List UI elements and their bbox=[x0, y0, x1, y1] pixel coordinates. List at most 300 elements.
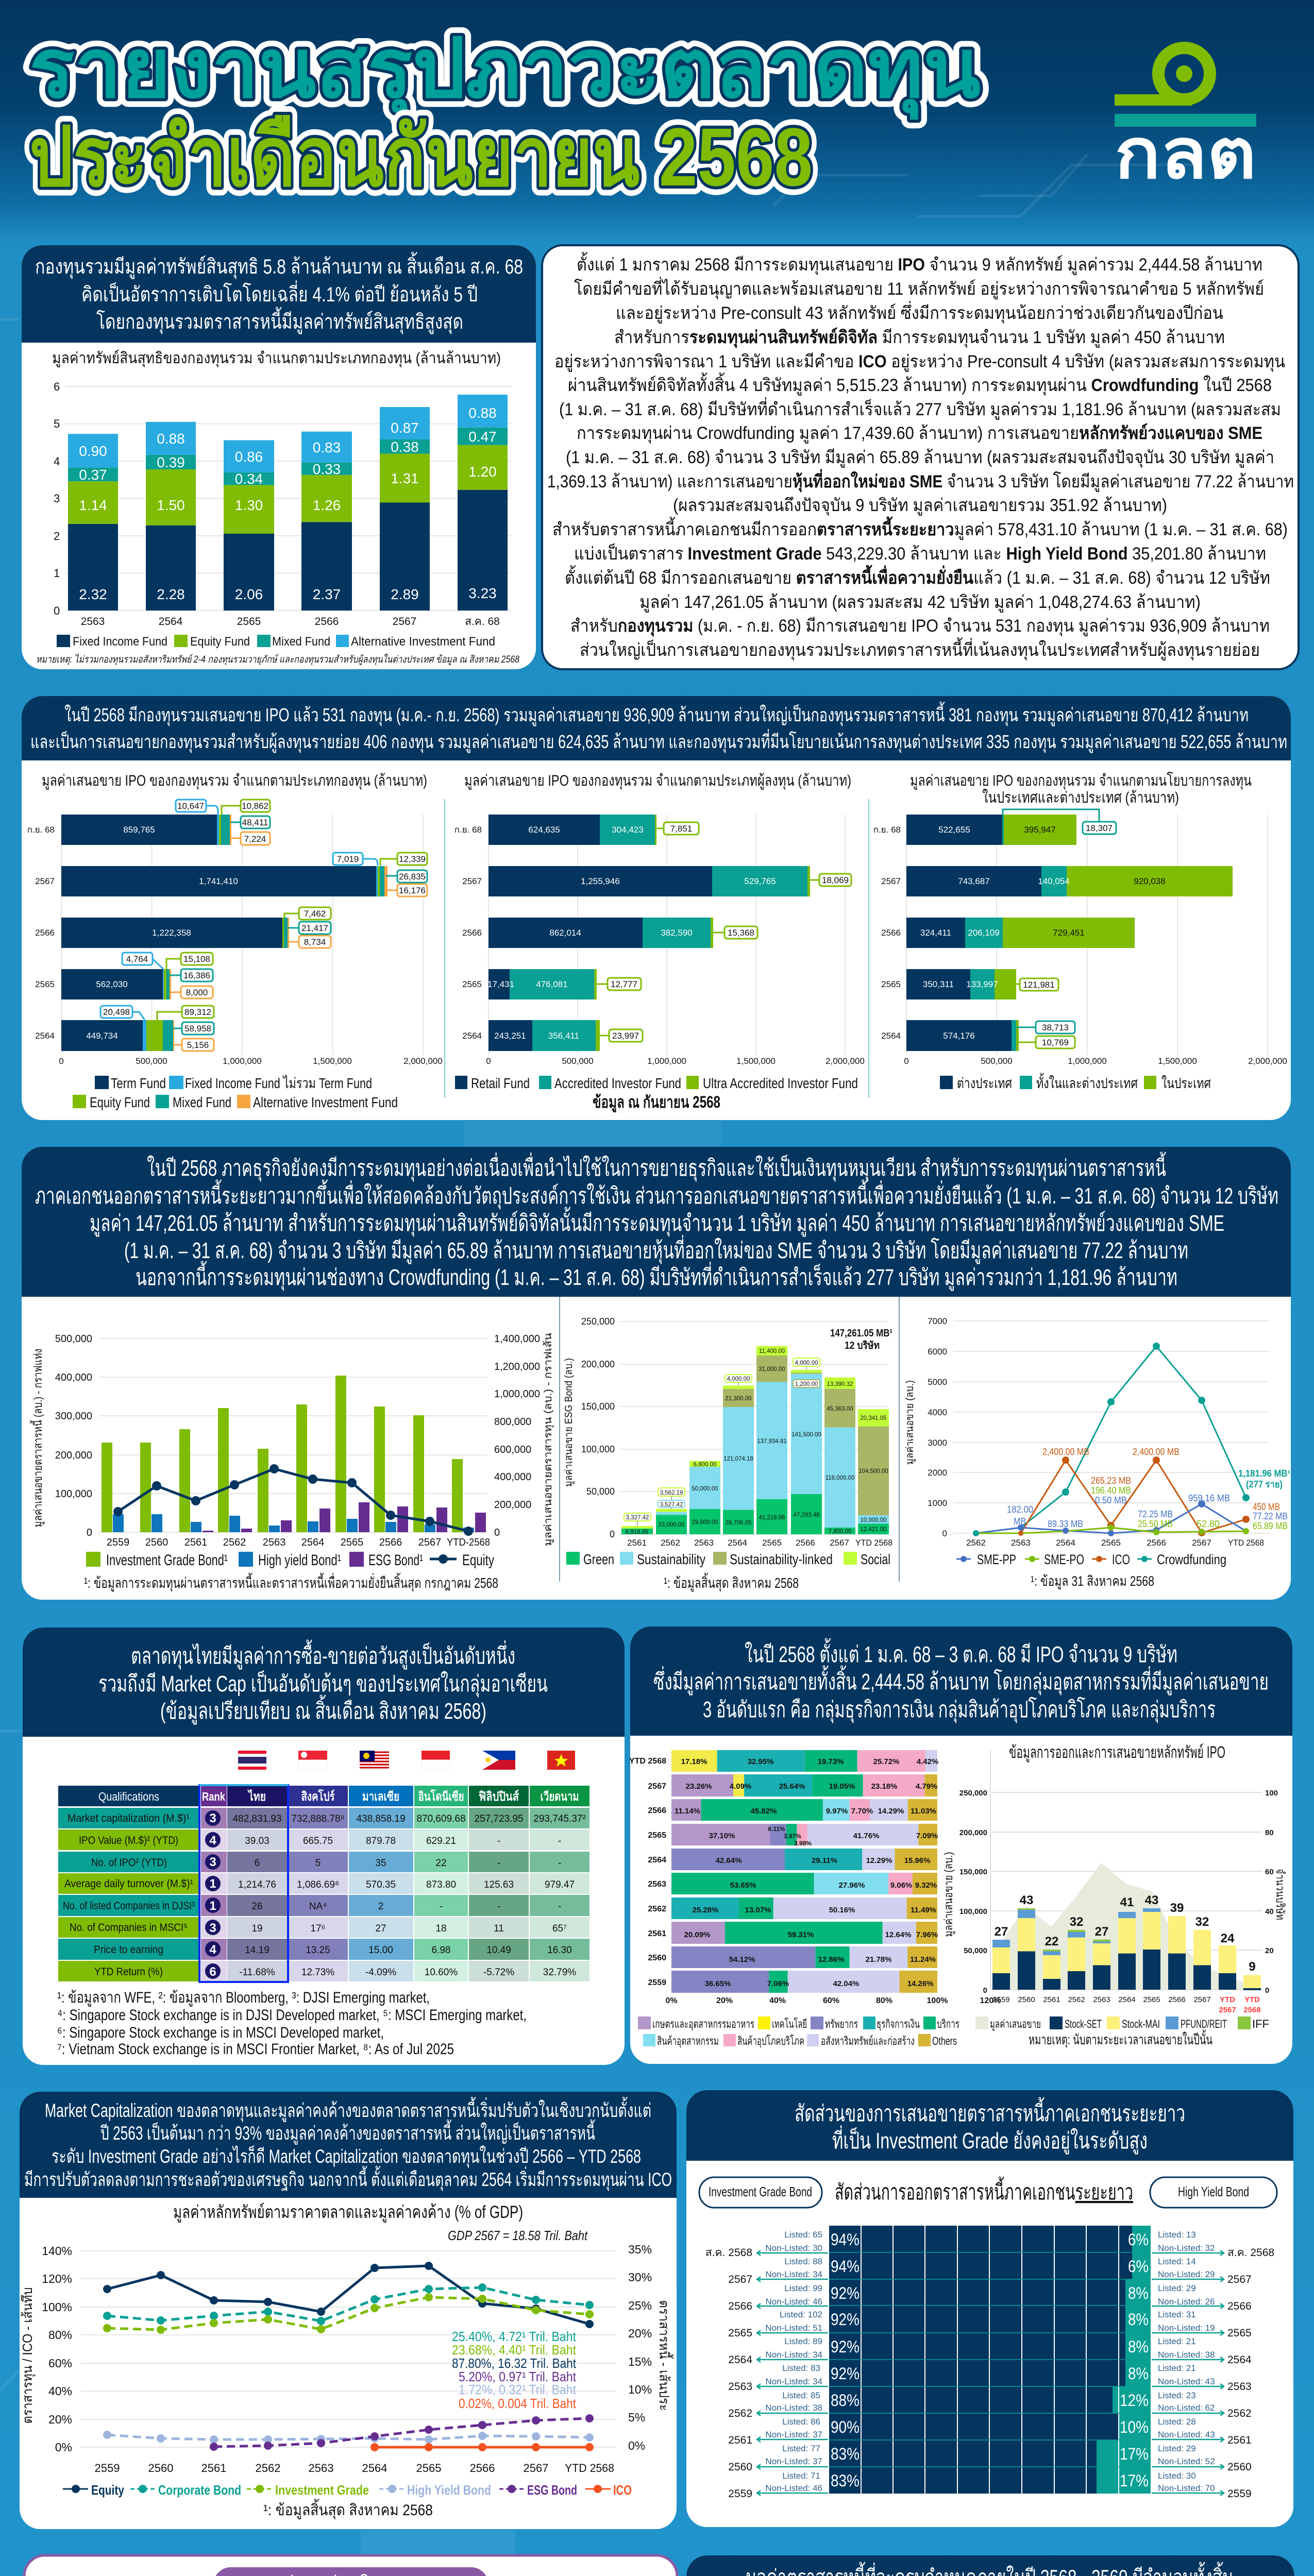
bar chart: investment policy: 2567 bbox=[881, 876, 901, 886]
bar chart: investment policy: 743,687 bbox=[958, 876, 990, 886]
legend: market cap: ESG Bond bbox=[527, 2482, 577, 2498]
bar chart: fund type: 8,000 bbox=[186, 988, 208, 997]
bar chart: fund type: 2565 bbox=[35, 979, 55, 989]
butterfly chart: bond share: 2566 bbox=[728, 2300, 752, 2312]
stacked bar chart: industry share bbox=[629, 1750, 1001, 2005]
stacked bar and area chart: IPO securities: 100,000 bbox=[959, 1907, 987, 1916]
bar chart: investor type: 117,431 bbox=[483, 979, 514, 989]
legend: industry share: บริการ bbox=[937, 2018, 959, 2030]
stacked bar chart: NAV: 2565 bbox=[237, 616, 261, 628]
table: ASEAN comparison: 870,609.68 bbox=[416, 1814, 466, 1824]
stacked bar chart: ESG bond: 118,000.00 bbox=[826, 1475, 854, 1481]
legend: IPO securities: PFUND/REIT bbox=[1181, 2018, 1227, 2030]
heading: corporate fundraising bbox=[35, 1151, 1278, 1291]
table: ASEAN comparison: 125.63 bbox=[484, 1879, 514, 1890]
stacked bar chart: industry share: 19.05% bbox=[829, 1782, 855, 1791]
bar chart: fund type: 58,958 bbox=[184, 1024, 211, 1033]
bar chart: investment policy: 38,713 bbox=[1042, 1023, 1069, 1032]
stacked bar chart: ESG bond bbox=[563, 1316, 892, 1548]
bar chart: fund type: ก.ย. 68 bbox=[27, 825, 55, 835]
stacked bar and area chart: IPO securities: 32 bbox=[1195, 1915, 1209, 1929]
legend: market cap: Investment Grade bbox=[275, 2482, 369, 2498]
table: ASEAN comparison: 257,723.95 bbox=[474, 1814, 524, 1824]
panel: summary text: (ผลรวมสะสมจนถึงปัจจุบัน 9 บริษัท มูลค่าเสนอขายรวม 351.92 ล้านบาท) bbox=[673, 496, 1167, 516]
stacked bar and area chart: IPO securities: มูลค่าเสนอขาย (ลบ.) bbox=[942, 1852, 955, 1937]
chart title: market cap: มูลค่าหลักทรัพย์ตามราคาตลาดและมูลค่าคงค้าง (% of GDP) bbox=[173, 2202, 523, 2223]
table: ASEAN comparison: No. of Companies in MSCI⁵ bbox=[70, 1922, 188, 1934]
stacked bar chart: ESG bond: 6,918.85 bbox=[626, 1529, 648, 1535]
stacked bar chart: NAV: 2.28 bbox=[157, 586, 185, 602]
combo chart: bonds and equity: 1,000,000 bbox=[494, 1388, 540, 1400]
table: ASEAN comparison: 4 bbox=[209, 1943, 216, 1957]
combo chart: bonds and equity: 200,000 bbox=[55, 1450, 92, 1461]
bar chart: fund type: 10,647 bbox=[177, 801, 204, 811]
bar chart: investment policy: 133,997 bbox=[966, 979, 998, 989]
stacked bar chart: industry share: YTD 2568 bbox=[629, 1757, 666, 1766]
stacked bar and area chart: IPO securities: 2566 bbox=[1168, 1995, 1186, 2004]
stacked bar and area chart: IPO securities: 80 bbox=[1265, 1828, 1274, 1837]
table: ASEAN comparison: 1,214.76 bbox=[238, 1879, 276, 1890]
line chart: other fundraising: 1,181.96 MB¹ bbox=[1238, 1468, 1290, 1479]
stacked bar chart: industry share: 40% bbox=[769, 1996, 786, 2005]
butterfly chart: bond share: 17% bbox=[1120, 2445, 1149, 2463]
combo chart: bonds and equity: 200,000 bbox=[494, 1499, 531, 1511]
table: ASEAN comparison: 19 bbox=[251, 1923, 263, 1934]
stacked bar chart: NAV: 2.32 bbox=[79, 586, 107, 602]
butterfly chart: bond share: Non-Listed: 19 bbox=[1158, 2323, 1215, 2333]
table: ASEAN comparison: No. of listed Companies in DJSI³ bbox=[63, 1900, 195, 1912]
stacked bar chart: ESG bond: 0 bbox=[610, 1529, 615, 1539]
combo chart: bonds and equity: มูลค่าเสนอขายตราสารหนี้ (ลบ.) - กราฟแท่ง bbox=[30, 1349, 45, 1527]
line chart: other fundraising: (277 ราย) bbox=[1246, 1479, 1283, 1489]
stacked bar chart: ESG bond: 150,000 bbox=[581, 1401, 615, 1412]
stacked bar chart: ESG bond: 50,000 bbox=[586, 1486, 615, 1497]
butterfly chart: bond share: 8% bbox=[1128, 2364, 1149, 2383]
stacked bar chart: NAV: 0.47 bbox=[468, 429, 497, 445]
table: ASEAN comparison: - bbox=[558, 1901, 561, 1912]
butterfly chart: bond share: 8% bbox=[1128, 2310, 1149, 2329]
note: other fundraising: ¹: ข้อมูล 31 สิงหาคม 2568 bbox=[1031, 1573, 1154, 1589]
butterfly chart: bond share: Listed: 13 bbox=[1158, 2230, 1196, 2240]
line chart: market cap bbox=[20, 2243, 674, 2475]
legend: IPO securities: Stock-MAI bbox=[1122, 2018, 1160, 2030]
pill: High Yield Bond: High Yield Bond bbox=[1178, 2184, 1249, 2199]
stacked bar and area chart: IPO securities: 2568 bbox=[1243, 2006, 1261, 2014]
stacked bar and area chart: IPO securities: 2559 bbox=[992, 1995, 1010, 2004]
legend: industry share bbox=[638, 2016, 959, 2048]
butterfly chart: bond share: 94% bbox=[831, 2230, 860, 2249]
table: ASEAN comparison: 482,831.93 bbox=[232, 1814, 282, 1824]
butterfly chart: bond share: 2561 bbox=[1227, 2434, 1252, 2446]
bar chart: investment policy: 2,000,000 bbox=[1248, 1056, 1287, 1066]
table: ASEAN comparison: 1 bbox=[209, 1877, 216, 1891]
stacked bar and area chart: IPO securities: 43 bbox=[1145, 1893, 1158, 1907]
bar chart: fund type: 449,734 bbox=[86, 1031, 118, 1041]
stacked bar chart: industry share: 13.07% bbox=[745, 1906, 771, 1914]
panel: summary text: มูลค่า 147,261.05 ล้านบาท (ผลรวมสะสม 42 บริษัท มูลค่า 1,048,274.63 ล้านบาท) bbox=[639, 592, 1201, 613]
stacked bar chart: NAV: 5 bbox=[54, 417, 60, 430]
stacked bar chart: NAV: 2567 bbox=[393, 616, 416, 628]
legend: fund type: Alternative Investment Fund bbox=[253, 1094, 398, 1110]
line chart: other fundraising: 3000 bbox=[928, 1438, 947, 1448]
bar chart: fund type: 1,741,410 bbox=[199, 876, 238, 886]
stacked bar chart: industry share: 11.14% bbox=[675, 1807, 700, 1816]
butterfly chart: bond share: ส.ค. 2568 bbox=[705, 2247, 752, 2259]
butterfly chart: bond share: 2562 bbox=[728, 2408, 752, 2419]
heading: investment grade share: ที่เป็น Investment Grade ยังคงอยู่ในระดับสูง bbox=[832, 2125, 1148, 2155]
table: ASEAN comparison: Rank bbox=[202, 1790, 225, 1803]
butterfly chart: bond share: Non-Listed: 43 bbox=[1158, 2377, 1215, 2386]
bar chart: investment policy: 574,176 bbox=[943, 1031, 975, 1041]
legend: ESG bond bbox=[566, 1551, 890, 1567]
stacked bar and area chart: IPO securities bbox=[942, 1750, 1287, 2014]
stacked bar chart: industry share: 53.65% bbox=[730, 1881, 756, 1890]
stacked bar chart: NAV: 1.26 bbox=[313, 497, 341, 513]
legend: bonds and equity: Equity bbox=[462, 1552, 494, 1569]
line chart: other fundraising: 0 bbox=[942, 1529, 947, 1538]
legend: other fundraising: Crowdfunding bbox=[1157, 1552, 1226, 1567]
note: IPO securities: หมายเหตุ: นับตามระยะเวลาเสนอขายในปีนั้น bbox=[1029, 2029, 1212, 2048]
stacked bar chart: NAV: ส.ค. 68 bbox=[465, 616, 500, 628]
stacked bar chart: ESG bond: 137,934.81 bbox=[757, 1438, 787, 1445]
bar chart: investor type: 7,851 bbox=[670, 824, 692, 834]
butterfly chart: bond share: Non-Listed: 34 bbox=[765, 2269, 822, 2279]
bar chart: investment policy: 1,000,000 bbox=[1068, 1056, 1107, 1066]
stacked bar chart: industry share: 60% bbox=[823, 1996, 839, 2005]
pill: Investment Grade Bond: Investment Grade Bond bbox=[709, 2184, 812, 2199]
butterfly chart: bond share: 2559 bbox=[728, 2488, 752, 2500]
butterfly chart: bond share bbox=[705, 2226, 1274, 2500]
bar chart: fund type: 21,417 bbox=[301, 923, 328, 933]
stacked bar chart: NAV: 6 bbox=[54, 380, 60, 393]
note: bonds: ¹: ข้อมูลการระดมทุนผ่านตราสารหนี้และตราสารหนี้เพื่อความยั่งยืนสิ้นสุด กรกฎาคม 2568 bbox=[84, 1572, 498, 1592]
butterfly chart: bond share: Listed: 21 bbox=[1158, 2336, 1196, 2346]
table: ASEAN comparison: YTD Return (%) bbox=[94, 1966, 163, 1978]
legend: ESG bond: Green bbox=[583, 1551, 614, 1567]
table: ASEAN comparison: 6 bbox=[209, 1965, 216, 1979]
legend: industry share: ธุรกิจการเงิน bbox=[877, 2018, 920, 2031]
stacked bar and area chart: IPO securities: 9 bbox=[1249, 1960, 1256, 1974]
stacked bar chart: industry share: 2562 bbox=[648, 1905, 666, 1913]
line chart: other fundraising: 2,400.00 MB bbox=[1042, 1447, 1089, 1457]
panel: summary text bbox=[542, 245, 1299, 669]
table: ASEAN comparison: 438,858.19 bbox=[356, 1814, 406, 1824]
butterfly chart: bond share: 92% bbox=[831, 2337, 860, 2356]
line chart: other fundraising: 2564 bbox=[1056, 1538, 1075, 1548]
stacked bar chart: industry share: 2563 bbox=[648, 1880, 666, 1889]
line chart: market cap: ตราสารทุน / ICO - เส้นทึบ bbox=[20, 2287, 36, 2424]
bar chart: investor type: 529,765 bbox=[744, 876, 776, 886]
butterfly chart: bond share: 8% bbox=[1128, 2337, 1149, 2356]
line chart: other fundraising: 265.23 MB bbox=[1091, 1476, 1131, 1486]
stacked bar and area chart: IPO securities: 20 bbox=[1265, 1946, 1274, 1955]
stacked bar chart: industry share: 4.42% bbox=[917, 1757, 938, 1766]
panel: corporate fundraising bbox=[22, 1147, 1291, 1600]
bar chart: investor type: 500,000 bbox=[562, 1056, 594, 1066]
table: ASEAN comparison: 6.98 bbox=[432, 1945, 450, 1956]
bar chart: fund type bbox=[27, 800, 443, 1066]
panel: summary text: อยู่ระหว่างการพิจารณา 1 บริษัท และมีคำขอ ICO อยู่ระหว่าง Pre-consult 4 บริษัท (ผลรวมสะสมการระดมทุน bbox=[554, 352, 1285, 372]
line chart: market cap: 2564 bbox=[362, 2462, 387, 2475]
butterfly chart: bond share: Listed: 28 bbox=[1158, 2417, 1196, 2427]
legend: fund type bbox=[73, 1075, 398, 1110]
combo chart: bonds and equity: 0 bbox=[494, 1527, 500, 1538]
stacked bar and area chart: IPO securities: 50,000 bbox=[964, 1946, 987, 1955]
stacked bar chart: ESG bond: 21,300.00 bbox=[725, 1396, 752, 1402]
stacked bar chart: NAV: 0.38 bbox=[391, 439, 419, 455]
table: ASEAN comparison: 3 bbox=[209, 1921, 216, 1935]
table: ASEAN comparison: 293,745.37² bbox=[533, 1814, 586, 1824]
table: ASEAN comparison: Price to earning bbox=[94, 1944, 163, 1956]
legend: industry share: ทรัพยากร bbox=[825, 2018, 858, 2030]
heading: market cap: ระดับ Investment Grade อย่างไรก็ดี Market Capitalization ของตลาดทุนในช่วงปี 2566 – YTD 2568 bbox=[52, 2144, 641, 2168]
stacked bar chart: industry share: 12.29% bbox=[866, 1856, 892, 1865]
chart titles: ในประเทศและต่างประเทศ (ล้านบาท) bbox=[982, 789, 1179, 806]
heading: fund IPO bbox=[30, 701, 1287, 753]
stacked bar and area chart: IPO securities: YTD bbox=[1220, 1995, 1235, 2004]
stacked bar chart: industry share: 80% bbox=[876, 1996, 892, 2005]
stacked bar chart: industry share: 21.78% bbox=[866, 1955, 891, 1964]
stacked bar chart: ESG bond: 250,000 bbox=[581, 1316, 615, 1327]
line chart: other fundraising: 5000 bbox=[928, 1377, 947, 1387]
stacked bar chart: ESG bond: YTD 2568 bbox=[855, 1538, 892, 1548]
combo chart: bonds and equity: 0 bbox=[87, 1527, 92, 1538]
butterfly chart: bond share: 2567 bbox=[1227, 2274, 1252, 2285]
table: ASEAN comparison: 1 bbox=[209, 1899, 216, 1913]
heading: IPO by industry bbox=[653, 1638, 1269, 1723]
stacked bar chart: ESG bond: 141,500.00 bbox=[791, 1432, 821, 1438]
butterfly chart: bond share: Listed: 85 bbox=[782, 2391, 820, 2400]
panel: fund IPO bbox=[22, 696, 1291, 1120]
notes: ASEAN comparison: ⁴: Singapore Stock exchange is in DJSI Developed market, ⁵: MSCI Emerging market, bbox=[57, 2007, 527, 2024]
stacked bar and area chart: IPO securities: 100 bbox=[1265, 1789, 1278, 1798]
legend: fund type: Mixed Fund bbox=[173, 1094, 231, 1110]
stacked bar chart: NAV: 0.90 bbox=[79, 443, 107, 459]
panel: summary text: สำหรับกองทุนรวม (ม.ค. - ก.ย. 68) มีการเสนอขาย IPO จำนวน 531 กองทุน มูลค่ารวม 936,909 ล้านบาท bbox=[570, 616, 1270, 637]
bar chart: investment policy: 10,769 bbox=[1042, 1038, 1069, 1047]
bar chart: fund type: 1,000,000 bbox=[223, 1056, 262, 1066]
table: ASEAN comparison: 16.30 bbox=[547, 1945, 572, 1956]
bar chart: fund type: 2,000,000 bbox=[403, 1056, 443, 1066]
legend: market cap: Equity bbox=[91, 2482, 124, 2498]
bar chart: investment policy: 0 bbox=[904, 1056, 909, 1066]
line chart: other fundraising: 2562 bbox=[966, 1538, 986, 1548]
stacked bar chart: ESG bond: 29,600.00 bbox=[692, 1519, 718, 1526]
stacked bar and area chart: IPO securities: 39 bbox=[1170, 1901, 1184, 1915]
butterfly chart: bond share: Listed: 88 bbox=[784, 2257, 822, 2266]
line chart: market cap: 2562 bbox=[256, 2462, 280, 2475]
butterfly chart: bond share: Listed: 14 bbox=[1158, 2257, 1196, 2266]
legend: IPO securities bbox=[975, 2016, 1269, 2031]
butterfly chart: bond share: Non-Listed: 32 bbox=[1158, 2243, 1215, 2253]
legend: market cap: ICO bbox=[613, 2482, 632, 2498]
bar chart: investor type: ก.ย. 68 bbox=[454, 825, 482, 835]
stacked bar chart: ESG bond: 3,327.42 bbox=[626, 1515, 649, 1521]
stacked bar chart: ESG bond: 147,261.05 MB¹ bbox=[830, 1328, 892, 1339]
panel: ASEAN comparison bbox=[23, 1628, 625, 2065]
stacked bar chart: industry share: 19.73% bbox=[818, 1757, 844, 1766]
title: รายงานสรุปภาวะตลาดทุน bbox=[29, 22, 981, 120]
line chart: market cap: 0% bbox=[628, 2439, 645, 2452]
stacked bar chart: ESG bond: 200,000 bbox=[581, 1359, 615, 1369]
stacked bar and area chart: IPO securities: 0 bbox=[983, 1986, 987, 1995]
stacked bar chart: NAV: 1.31 bbox=[391, 470, 419, 486]
combo chart: bonds and equity: 2567 bbox=[418, 1537, 441, 1548]
legend: NAV: Mixed Fund bbox=[272, 635, 330, 649]
table: ASEAN comparison: 665.75 bbox=[303, 1836, 333, 1846]
butterfly chart: bond share: Non-Listed: 62 bbox=[1158, 2403, 1215, 2413]
butterfly chart: bond share: 83% bbox=[831, 2445, 860, 2463]
line chart: market cap: 23.68%, 4.40¹ Tril. Baht bbox=[452, 2342, 577, 2358]
bar chart: investment policy: 920,038 bbox=[1134, 876, 1166, 886]
line chart: market cap: 0.02%, 0.004 Tril. Baht bbox=[459, 2396, 577, 2411]
stacked bar chart: industry share: 25.64% bbox=[779, 1782, 805, 1791]
stacked bar chart: industry share: 23.26% bbox=[686, 1782, 712, 1791]
notes: ASEAN comparison: ⁶: Singapore Stock exchange is in MSCI Developed market, bbox=[57, 2024, 384, 2041]
panel: summary text: สำหรับตราสารหนี้ภาคเอกชนมีการออกตราสารหนี้ระยะยาวมูลค่า 578,431.10 ล้านบาท (1 ม.ค. – 31 ส.ค. 68) bbox=[552, 516, 1288, 540]
table: ASEAN comparison: มาเลเซีย bbox=[362, 1790, 399, 1804]
legend: bonds and equity: Investment Grade Bond¹ bbox=[106, 1552, 228, 1569]
butterfly chart: bond share: 8% bbox=[1128, 2284, 1149, 2302]
bar chart: fund type: 89,312 bbox=[184, 1007, 211, 1017]
combo chart: bonds and equity: 100,000 bbox=[55, 1488, 92, 1500]
line chart: market cap: 2566 bbox=[470, 2462, 495, 2475]
stacked bar chart: industry share: 41.76% bbox=[853, 1832, 879, 1840]
stacked bar and area chart: IPO securities: YTD bbox=[1244, 1995, 1260, 2004]
combo chart: bonds and equity: 2565 bbox=[341, 1537, 363, 1548]
butterfly chart: bond share: Non-Listed: 46 bbox=[765, 2297, 822, 2307]
panel: maturing bonds bbox=[686, 2555, 1294, 2576]
stacked bar chart: industry share: 23.18% bbox=[871, 1782, 897, 1791]
stacked bar chart: ESG bond: 31,000.00 bbox=[759, 1366, 785, 1372]
line chart: market cap: 2565 bbox=[416, 2462, 441, 2475]
line chart: market cap: 35% bbox=[628, 2243, 652, 2256]
stacked bar and area chart: IPO securities: 43 bbox=[1020, 1893, 1033, 1907]
stacked bar chart: industry share: 14.26% bbox=[907, 1979, 933, 1988]
butterfly chart: bond share: 94% bbox=[831, 2257, 860, 2276]
stacked bar chart: industry share: 2559 bbox=[648, 1978, 666, 1987]
butterfly chart: bond share: Listed: 71 bbox=[782, 2471, 820, 2481]
note: NAV: หมายเหตุ: ไม่รวมกองทุนรวมอสังหาริมทรัพย์ 2-4 กองทุนรวมวายุภักษ์ และกองทุนรวมสำหรับผู้ลงทุนในต่างประเทศ ข้อมูล ณ สิงหาคม 2568 bbox=[36, 653, 519, 665]
bar chart: fund type: 16,386 bbox=[183, 971, 210, 980]
combo chart: bonds and equity: 600,000 bbox=[494, 1444, 531, 1455]
legend: investor type: Ultra Accredited Investor Fund bbox=[703, 1075, 858, 1091]
legend: other fundraising bbox=[956, 1552, 1226, 1567]
title: ประจำเดือนกันยายน 2568 bbox=[29, 111, 813, 203]
butterfly chart: bond share: Non-Listed: 38 bbox=[1158, 2350, 1215, 2360]
stacked bar chart: NAV: 4 bbox=[54, 455, 60, 468]
table: ASEAN comparison: ฟิลิปปินส์ bbox=[479, 1789, 519, 1804]
heading: mutual fund NAV: คิดเป็นอัตราการเติบโตโดยเฉลี่ย 4.1% ต่อปี ย้อนหลัง 5 ปี bbox=[81, 280, 478, 306]
combo chart: bonds and equity: 300,000 bbox=[55, 1411, 92, 1422]
butterfly chart: bond share: ส.ค. 2568 bbox=[1227, 2247, 1274, 2259]
stacked bar and area chart: IPO securities: 27 bbox=[1095, 1925, 1108, 1939]
bar chart: investor type bbox=[454, 815, 865, 1066]
line chart: other fundraising: 0.50 MB bbox=[1095, 1495, 1127, 1505]
table: ASEAN comparison: -11.68% bbox=[239, 1967, 275, 1978]
combo chart: bonds and equity: 400,000 bbox=[55, 1372, 92, 1383]
stacked bar chart: industry share: 36.65% bbox=[705, 1979, 731, 1988]
logo: SEC bbox=[1115, 48, 1256, 193]
stacked bar chart: NAV: 0 bbox=[54, 604, 60, 617]
bar chart: investment policy: 500,000 bbox=[981, 1056, 1013, 1066]
stacked bar chart: industry share: 4.09% bbox=[730, 1782, 751, 1791]
stacked bar chart: ESG bond: 2564 bbox=[728, 1538, 747, 1548]
panel: summary text: ส่วนใหญ่เป็นการเสนอขายกองทุนรวมประเภทตราสารหนี้ที่เน้นลงทุนในประเทศสำหรับผู้ลงทุนรายย่อย bbox=[580, 637, 1260, 660]
table: ASEAN comparison: 1,086.69⁸ bbox=[297, 1879, 339, 1890]
table: ASEAN comparison: 873.80 bbox=[426, 1879, 456, 1890]
bar chart: investment policy: 206,109 bbox=[968, 928, 1000, 938]
table: ASEAN comparison: - bbox=[497, 1836, 500, 1846]
bar chart: investor type: 0 bbox=[486, 1056, 491, 1066]
stacked bar chart: ESG bond: 1,200.00 bbox=[795, 1381, 818, 1387]
bar chart: fund type: 7,224 bbox=[244, 834, 266, 844]
stacked bar chart: NAV bbox=[54, 380, 511, 628]
stacked bar chart: ESG bond: 4,000.00 bbox=[727, 1376, 750, 1382]
stacked bar chart: industry share: 11.24% bbox=[910, 1955, 936, 1964]
stacked bar chart: ESG bond: 3,562.19 bbox=[660, 1490, 683, 1496]
legend: other fundraising: ICO bbox=[1112, 1552, 1130, 1567]
bar chart: fund type: 562,030 bbox=[96, 979, 128, 989]
panel: summary text: แบ่งเป็นตราสาร Investment Grade 543,229.30 ล้านบาท และ High Yield Bond 35,201.80 ล้านบาท bbox=[574, 543, 1266, 564]
butterfly chart: bond share: Non-Listed: 30 bbox=[765, 2243, 822, 2253]
line chart: market cap: 0% bbox=[55, 2441, 72, 2454]
combo chart: bonds and equity: YTD-2568 bbox=[447, 1537, 490, 1548]
data date note: ข้อมูล ณ กันยายน 2568 bbox=[593, 1093, 720, 1113]
legend: investor type: Accredited Investor Fund bbox=[554, 1075, 681, 1091]
stacked bar chart: ESG bond: 2565 bbox=[762, 1538, 782, 1548]
stacked bar chart: industry share: 9.97% bbox=[826, 1807, 848, 1816]
line chart: other fundraising: 182.00 bbox=[1007, 1504, 1033, 1515]
legend: NAV: Equity Fund bbox=[190, 635, 250, 649]
table: ASEAN comparison: 10.60% bbox=[425, 1967, 458, 1978]
line chart: market cap: 20% bbox=[48, 2413, 72, 2426]
heading: ASEAN comparison bbox=[98, 1639, 548, 1725]
line chart: market cap: 25.40%, 4.72¹ Tril. Baht bbox=[452, 2329, 577, 2344]
combo chart: bonds and equity: 2566 bbox=[379, 1537, 402, 1548]
stacked bar chart: NAV: 2564 bbox=[159, 616, 183, 628]
stacked bar and area chart: IPO securities: 2560 bbox=[1018, 1995, 1035, 2004]
stacked bar chart: ESG bond: 41,218.86 bbox=[759, 1515, 785, 1521]
line chart: other fundraising: 4000 bbox=[928, 1408, 947, 1417]
stacked bar chart: industry share: 20.09% bbox=[684, 1930, 710, 1939]
line chart: other fundraising: 65.89 MB bbox=[1253, 1521, 1288, 1531]
pill: Investment Grade Bond bbox=[699, 2177, 822, 2208]
stacked bar chart: industry share: 0% bbox=[665, 1996, 678, 2005]
butterfly chart: bond share: Listed: 31 bbox=[1158, 2310, 1196, 2319]
notes: ASEAN comparison: ⁷: Vietnam Stock exchange is in MSCI Frontier Market, ⁸: As of Jul 2025 bbox=[57, 2041, 454, 2058]
stacked bar chart: ESG bond: 7,800.00 bbox=[829, 1529, 851, 1535]
butterfly chart: bond share: 2567 bbox=[728, 2274, 752, 2285]
bar chart: fund type: 2567 bbox=[35, 876, 55, 886]
table: ASEAN comparison: -4.09% bbox=[365, 1967, 396, 1978]
logo: SEC: กลต bbox=[1115, 115, 1256, 193]
line chart: market cap: ตราสารหนี้ - เส้นประ bbox=[656, 2300, 674, 2411]
bar chart: fund type: 10,862 bbox=[242, 801, 268, 811]
stacked bar and area chart: IPO securities: 2565 bbox=[1143, 1995, 1160, 2004]
table: ASEAN comparison: - bbox=[497, 1858, 500, 1869]
stacked bar chart: NAV: 2 bbox=[54, 530, 60, 543]
bar chart: fund type: 7,462 bbox=[304, 909, 326, 919]
bar chart: investor type: 15,368 bbox=[728, 928, 754, 938]
combo chart: bonds and equity: 2564 bbox=[301, 1537, 324, 1548]
butterfly chart: bond share: 92% bbox=[831, 2364, 860, 2383]
stacked bar chart: ESG bond: 2567 bbox=[830, 1538, 849, 1548]
legend: industry share: อสังหาริมทรัพย์และก่อสร้าง bbox=[821, 2035, 915, 2047]
butterfly chart: bond share: Listed: 83 bbox=[782, 2363, 820, 2373]
stacked bar chart: industry share: 2561 bbox=[648, 1929, 666, 1938]
bar chart: fund type: 8,734 bbox=[304, 937, 326, 947]
